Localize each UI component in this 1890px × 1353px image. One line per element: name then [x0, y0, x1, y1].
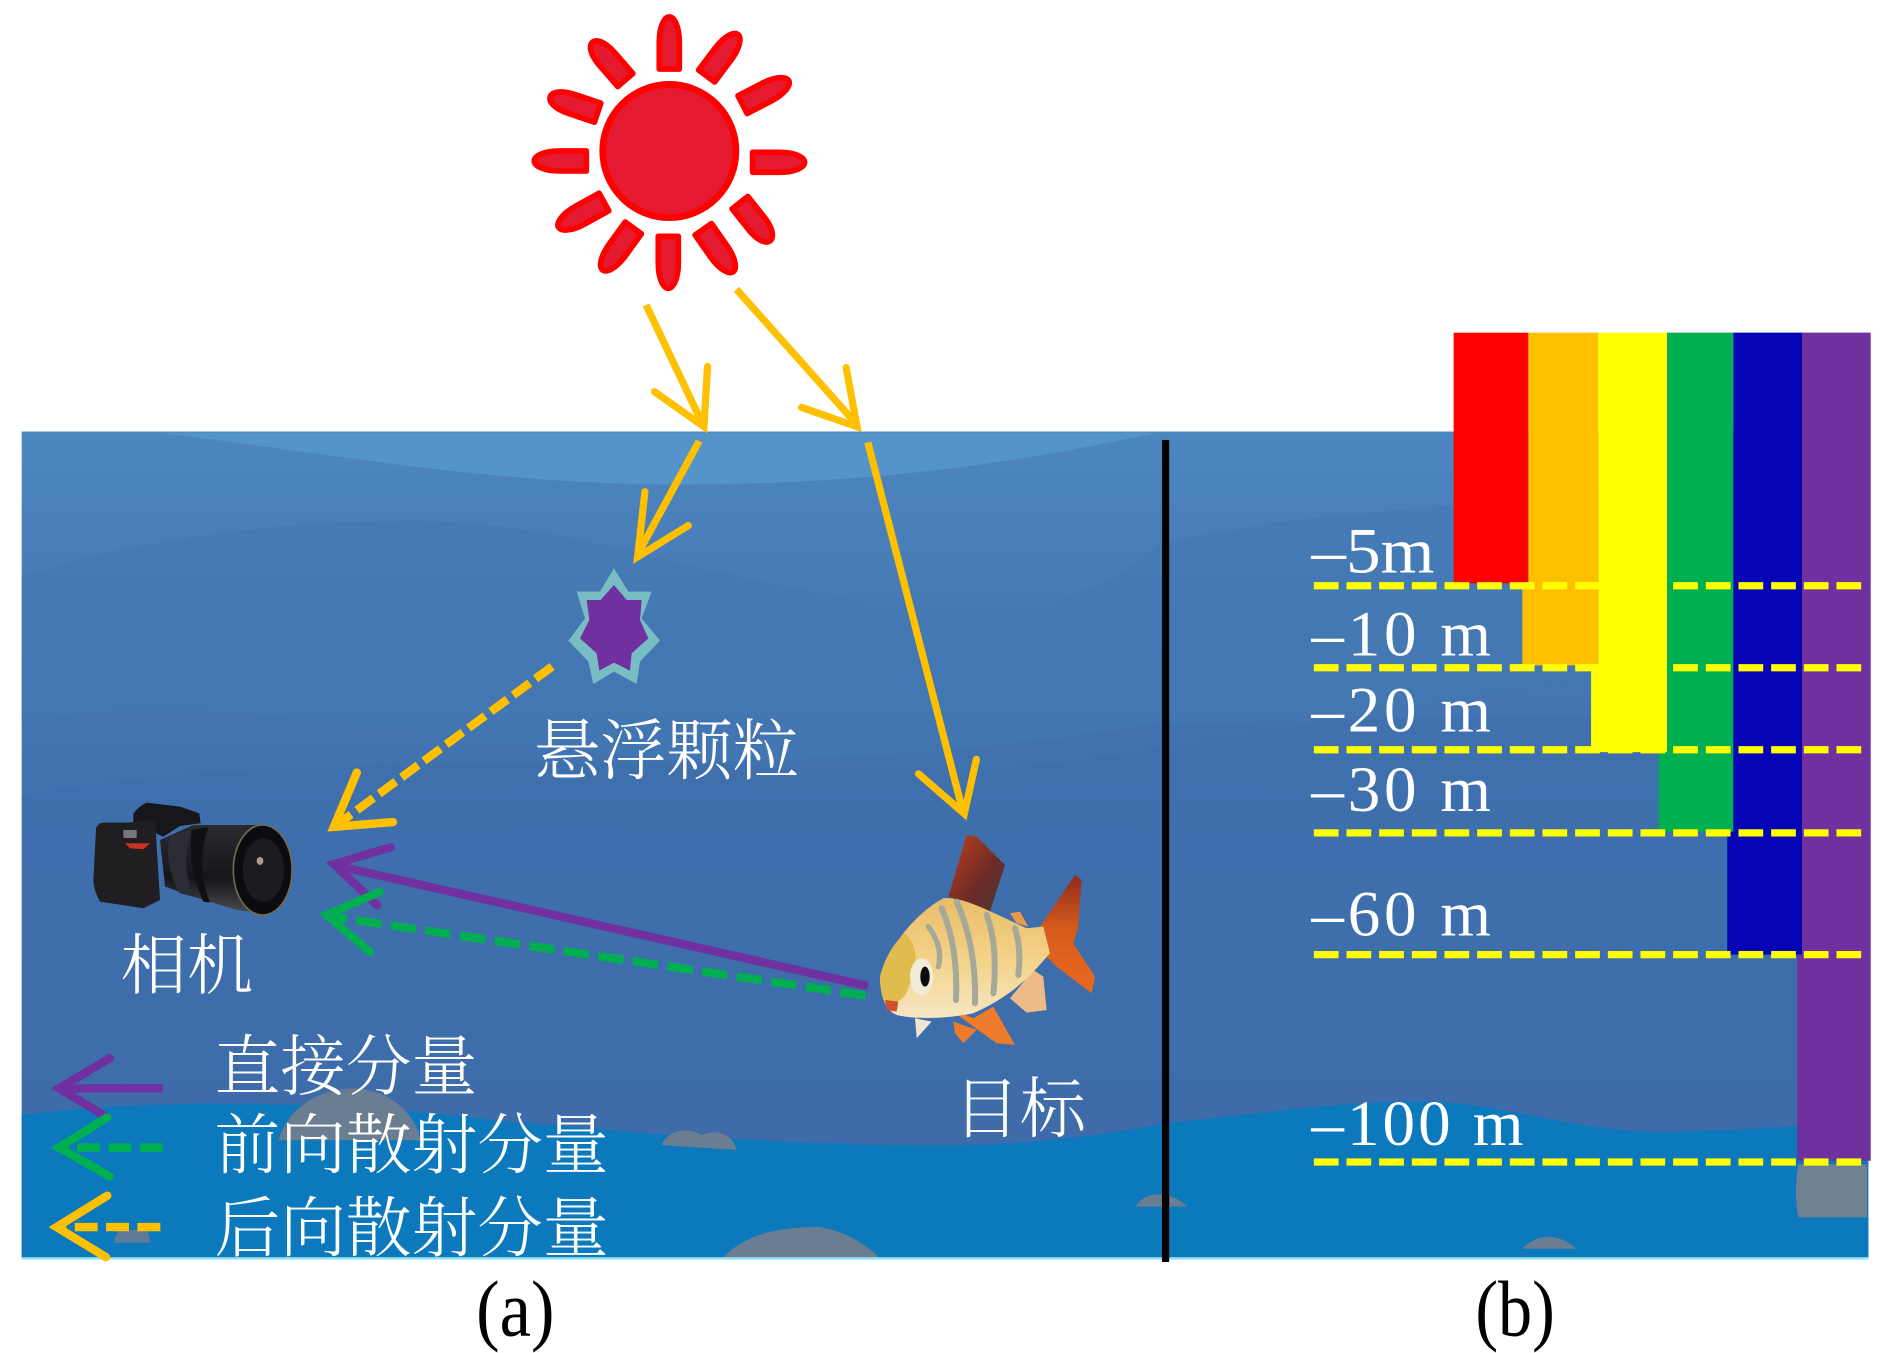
legend: direct component: 直接分量 [215, 1032, 477, 1105]
bar: violet [1797, 333, 1871, 1161]
label: -30 m: –30 m [1310, 754, 1491, 826]
bar: red [1454, 333, 1528, 583]
icon: fish [880, 835, 1095, 1045]
bottom edge [22, 1257, 1868, 1260]
arrow: forward scatter [327, 892, 865, 996]
label: target: 目标 [953, 1074, 1088, 1147]
icon: sun [534, 17, 805, 288]
arrow: direct component [334, 847, 868, 986]
depth lines [1314, 586, 1862, 1162]
bar: orange [1522, 333, 1598, 665]
divider [1162, 440, 1169, 1262]
arrow: surface to fish [868, 442, 976, 814]
label: -60 m: –60 m [1310, 878, 1491, 950]
arrow: sun to surface, left [646, 305, 708, 427]
bar: green [1659, 333, 1733, 832]
bar: blue [1727, 333, 1802, 955]
sea floor [22, 1101, 1868, 1258]
label: -100 m: –100 m [1310, 1088, 1524, 1160]
legend: backscatter: 后向散射分量 [215, 1193, 609, 1266]
arrow: backscatter to camera [334, 667, 552, 827]
arrow: surface to particle [638, 441, 699, 557]
icon: camera [93, 803, 292, 915]
legend: forward scatter: 前向散射分量 [215, 1110, 609, 1183]
caption (b): (b) [1475, 1266, 1555, 1353]
icon: suspended particle star [568, 568, 660, 684]
rocks [113, 1088, 1867, 1258]
label: -5 m: –5m [1310, 516, 1434, 588]
arrow: sun to surface, right [736, 289, 857, 427]
label: suspended particles: 悬浮颗粒 [534, 716, 799, 789]
label: -20 m: –20 m [1310, 675, 1491, 747]
label: -10 m: –10 m [1310, 599, 1491, 671]
chart: light attenuation bars [1454, 333, 1871, 1161]
legend: direct component [58, 1032, 477, 1117]
bar: yellow [1591, 333, 1667, 752]
label: camera: 相机 [121, 930, 253, 1003]
panel: water background [22, 432, 1868, 1260]
caption (a): (a) [476, 1266, 554, 1353]
